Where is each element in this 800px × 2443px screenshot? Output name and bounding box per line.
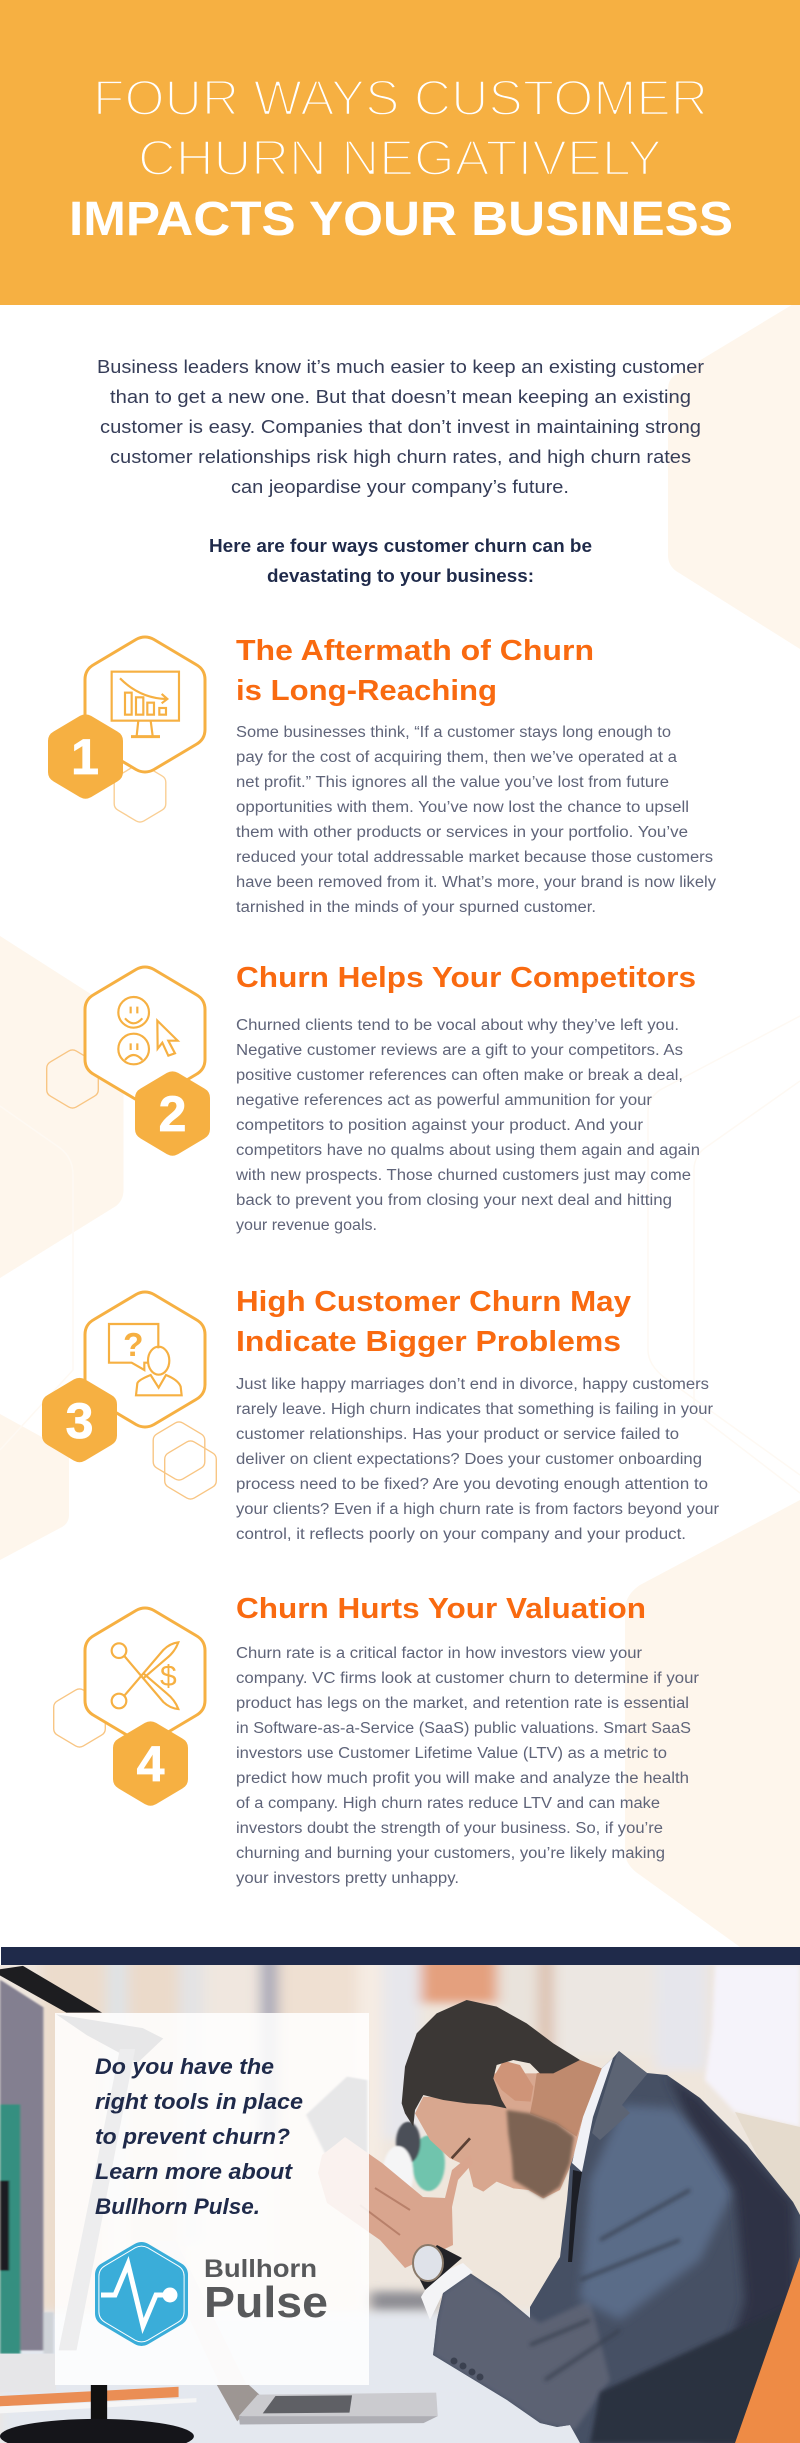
section 2 heading: Churn Helps Your Competitors — [236, 962, 696, 994]
section 1 heading: The Aftermath of Churn — [236, 635, 594, 667]
section 3 body text: deliver on client expectations? Does your customer onboarding — [236, 1451, 702, 1468]
section 2 body text: back to prevent you from closing your next deal and hitting — [236, 1192, 672, 1209]
section 4 body text: investors doubt the strength of your business. So, if you’re — [236, 1820, 663, 1837]
icon: presentation screen with falling chart — [112, 672, 179, 737]
standing person in background — [705, 1965, 800, 2222]
section 4 body text: investors use Customer Lifetime Value (LTV) as a metric to — [236, 1745, 667, 1762]
intro bold lead-in: Here are four ways customer churn can be — [209, 536, 592, 556]
call to action text: to prevent churn? — [95, 2124, 290, 2149]
section 2 body text: Churned clients tend to be vocal about why they’ve left you. — [236, 1017, 679, 1034]
number badge 1: 1 — [71, 729, 99, 785]
number badge 4: 4 — [137, 1736, 165, 1792]
section 1 heading: is Long-Reaching — [236, 675, 497, 707]
section 1 body text: have been removed from it. What’s more, your brand is now likely — [236, 874, 716, 891]
man: shirt collar and tie — [568, 2058, 613, 2262]
title — [69, 70, 733, 246]
section 1 body text: tarnished in the minds of your spurned customer. — [236, 899, 596, 916]
number badge 2 — [135, 1071, 210, 1156]
icon: blue hexagon with pulse line — [95, 2242, 188, 2346]
section 1 body text — [236, 724, 716, 916]
intro paragraph: than to get a new one. But that doesn’t mean keeping an existing — [110, 387, 691, 407]
logo: Bullhorn Pulse: Pulse — [204, 2278, 328, 2327]
section 4 body text: your investors pretty unhappy. — [236, 1870, 459, 1887]
monitor and lamp on the left — [0, 1980, 54, 2354]
section 2 body text: competitors have no qualms about using them again and again — [236, 1142, 700, 1159]
section 3 body text: customer relationships. Has your product or service failed to — [236, 1426, 679, 1443]
section 2 icon group — [47, 967, 210, 1156]
section 3 body text: your clients? Even if a high churn rate is from factors beyond your — [236, 1501, 719, 1518]
call to action text: Learn more about — [95, 2159, 294, 2184]
section 3 body text: rarely leave. High churn indicates that something is failing in your — [236, 1401, 713, 1418]
call to action text — [95, 2054, 303, 2219]
section 4 body text: in Software-as-a-Service (SaaS) public valuations. Smart SaaS — [236, 1720, 691, 1737]
intro paragraph: customer is easy. Companies that don’t invest in maintaining strong — [100, 417, 701, 437]
man: hand, cuff and watch — [318, 2137, 473, 2320]
intro bold lead-in: devastating to your business: — [267, 566, 534, 586]
title: IMPACTS YOUR BUSINESS — [69, 193, 733, 246]
intro paragraph: customer relationships risk high churn rates, and high churn rates — [110, 447, 691, 467]
title: CHURN NEGATIVELY — [138, 130, 662, 186]
background: pale hexagon shapes — [0, 300, 800, 1947]
icon: person with question bubble: ? — [123, 1327, 144, 1364]
intro paragraph: Business leaders know it’s much easier to keep an existing customer — [97, 357, 704, 377]
section 4 body text: company. VC firms look at customer churn to determine if your — [236, 1670, 699, 1687]
man: suit jacket — [420, 2040, 800, 2443]
desk items: notebook and lamp base — [0, 2354, 196, 2443]
call to action text: Bullhorn Pulse. — [95, 2194, 260, 2219]
man: head and hair — [402, 2000, 602, 2198]
section 4 body text: Churn rate is a critical factor in how investors view your — [236, 1645, 642, 1662]
intro paragraph: can jeopardise your company’s future. — [231, 477, 569, 497]
section 1 body text: Some businesses think, “If a customer stays long enough to — [236, 724, 671, 741]
section 3 heading — [236, 1286, 631, 1358]
section 2 body text: negative references act as powerful ammunition for your — [236, 1092, 652, 1109]
section 4 body text: predict how much profit you will make and analyze the health — [236, 1770, 689, 1787]
call to action text: Do you have the — [95, 2054, 274, 2079]
section 2 body text — [235, 1017, 700, 1234]
number badge 3 — [42, 1378, 117, 1462]
section 2 body text: Negative customer reviews are a gift to your competitors. As — [236, 1042, 683, 1059]
section 1 heading — [236, 635, 594, 707]
section 2 body text: your revenue goals. — [236, 1217, 377, 1234]
section 4 icon group — [54, 1608, 205, 1806]
section 1 body text: them with other products or services in your portfolio. You’ve — [236, 824, 688, 841]
section 1 body text: opportunities with them. You’ve now lost the chance to upsell — [236, 799, 689, 816]
number badge 4 — [113, 1721, 188, 1806]
number badge 1 — [48, 714, 123, 799]
section 2 body text: positive customer references can often make or break a deal, — [236, 1067, 683, 1084]
section 1 icon group — [48, 637, 205, 822]
section 3 body text: process need to be fixed? Are you devoting enough attention to — [236, 1476, 708, 1493]
section 2 body text: competitors to position against your product. And your — [236, 1117, 643, 1134]
section 1 body text: net profit.” This ignores all the value you’ve lost from future — [236, 774, 669, 791]
intro bold lead-in — [209, 536, 592, 586]
logo: Bullhorn Pulse: Bullhorn — [204, 2255, 317, 2283]
title: FOUR WAYS CUSTOMER — [93, 70, 708, 126]
section 4 body text: of a company. High churn rates reduce LTV and can make — [236, 1795, 660, 1812]
section 3 body text: control, it reflects poorly on your company and your product. — [236, 1526, 686, 1543]
section 4 body text: churning and burning your customers, you’re likely making — [236, 1845, 665, 1862]
navy divider bar — [1, 1947, 800, 1965]
section 1 body text: pay for the cost of acquiring them, then we’ve operated at a — [236, 749, 677, 766]
call to action text: right tools in place — [95, 2089, 303, 2114]
section 1 body text: reduced your total addressable market because those customers — [236, 849, 713, 866]
photo: stressed businessman at laptop — [0, 1952, 800, 2443]
section 2 body text: with new prospects. Those churned customers just may come — [235, 1167, 691, 1184]
photo backdrop: blurred office — [0, 1952, 800, 2443]
section 4 body text: product has legs on the market, and retention rate is essential — [236, 1695, 689, 1712]
section 3 body text: Just like happy marriages don’t end in divorce, happy customers — [236, 1376, 709, 1393]
intro paragraph — [97, 357, 704, 497]
section 3 icon group — [42, 1292, 216, 1499]
icon: scissors cutting dollar: $ — [160, 1660, 177, 1693]
icon: scissors cutting dollar — [112, 1642, 178, 1709]
icon: smiley faces and cursor — [118, 997, 178, 1064]
section 3 heading: Indicate Bigger Problems — [236, 1326, 621, 1358]
section 4 heading: Churn Hurts Your Valuation — [236, 1593, 646, 1625]
icon: person with question bubble — [109, 1324, 182, 1395]
translucent white panel — [55, 2013, 369, 2385]
sleeve buttons — [450, 2358, 484, 2380]
section 3 heading: High Customer Churn May — [236, 1286, 631, 1318]
orange chair — [735, 2257, 800, 2443]
logo: Bullhorn Pulse — [95, 2242, 328, 2346]
number badge 2: 2 — [159, 1086, 186, 1142]
number badge 3: 3 — [66, 1393, 93, 1449]
section 4 body text — [236, 1645, 699, 1887]
laptop — [217, 2385, 438, 2424]
header banner — [0, 0, 800, 305]
section 3 body text — [236, 1376, 719, 1543]
